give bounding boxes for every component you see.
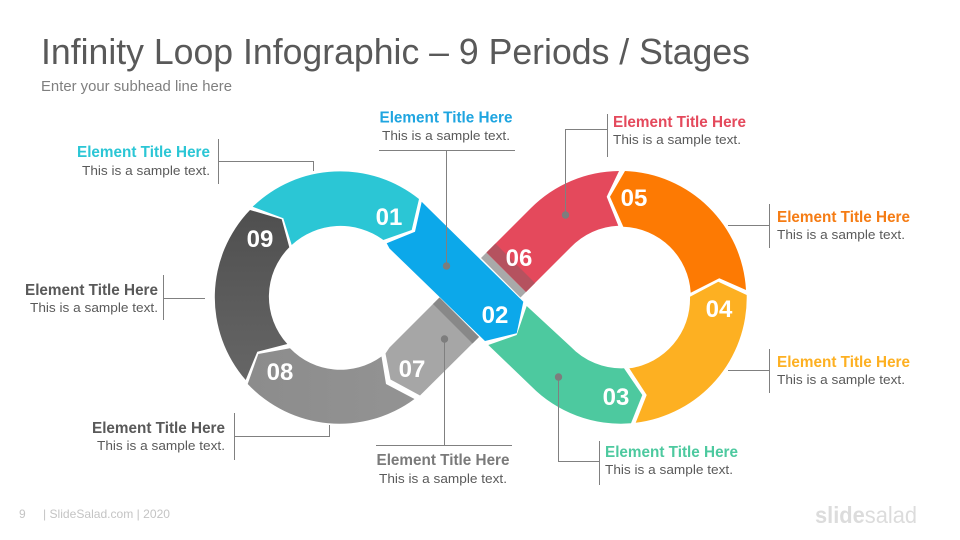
- stage 07: light grey diagonal band: This is a sample text.: [379, 471, 507, 486]
- stage 01: teal ring segment: 01: [376, 204, 402, 231]
- stage 05: orange ring segment: This is a sample text.: [777, 227, 905, 242]
- stage 01: teal ring segment: This is a sample text.: [82, 163, 210, 178]
- stage 08: mid grey ring segment: Element Title Here: [92, 420, 225, 437]
- footer source: | SlideSalad.com | 2020: [43, 507, 170, 521]
- stage 04: amber ring segment: [629, 282, 910, 423]
- stage 08: mid grey ring segment: 08: [267, 359, 293, 386]
- footer page number: 9: [19, 507, 26, 521]
- stage 05: orange ring segment: [610, 171, 910, 293]
- stage 06: red band and arc: Element Title Here: [613, 114, 746, 131]
- stage 02: blue diagonal band: This is a sample text.: [382, 128, 510, 143]
- stage 05: orange ring segment: 05: [621, 185, 647, 212]
- stage 04: amber ring segment: This is a sample text.: [777, 372, 905, 387]
- stage 01: teal ring segment: Element Title Here: [77, 144, 210, 161]
- stage 09: dark grey ring segment: Element Title Here: [25, 282, 158, 299]
- stage 04: amber ring segment: Element Title Here: [777, 354, 910, 371]
- stage 03: green band and arc: Element Title Here: [605, 444, 738, 461]
- stage 01: teal ring segment: [77, 139, 419, 245]
- stage 06: red band and arc: [481, 114, 746, 298]
- stage 06: red band and arc: 06: [506, 245, 532, 272]
- stage 08: mid grey ring segment: This is a sample text.: [97, 438, 225, 453]
- subhead: Enter your subhead line here: [41, 79, 232, 95]
- stage 09: dark grey ring segment: 09: [247, 226, 273, 253]
- stage 07: light grey diagonal band: [376, 298, 512, 486]
- stage 09: dark grey ring segment: This is a sample text.: [30, 300, 158, 315]
- stage 07: light grey diagonal band: 07: [399, 356, 425, 383]
- stage 06: red band and arc: This is a sample text.: [613, 132, 741, 147]
- stage 03: green band and arc: 03: [603, 384, 629, 411]
- stage 02: blue diagonal band: 02: [482, 302, 508, 329]
- stage 07: light grey diagonal band: Element Title Here: [376, 452, 510, 469]
- stage 08: mid grey ring segment: [92, 348, 414, 460]
- title: Infinity Loop Infographic – 9 Periods / Stages: [41, 31, 750, 72]
- stage 04: amber ring segment: 04: [706, 296, 733, 323]
- logo: slidesalad: slidesalad: [815, 502, 917, 528]
- stage 02: blue diagonal band: Element Title Here: [380, 110, 513, 126]
- stage 05: orange ring segment: Element Title Here: [777, 209, 910, 226]
- stage 02: blue diagonal band: [379, 110, 523, 341]
- stage 09: dark grey ring segment: [25, 210, 289, 380]
- stage 03: green band and arc: [488, 306, 738, 485]
- stage 03: green band and arc: This is a sample text.: [605, 462, 733, 477]
